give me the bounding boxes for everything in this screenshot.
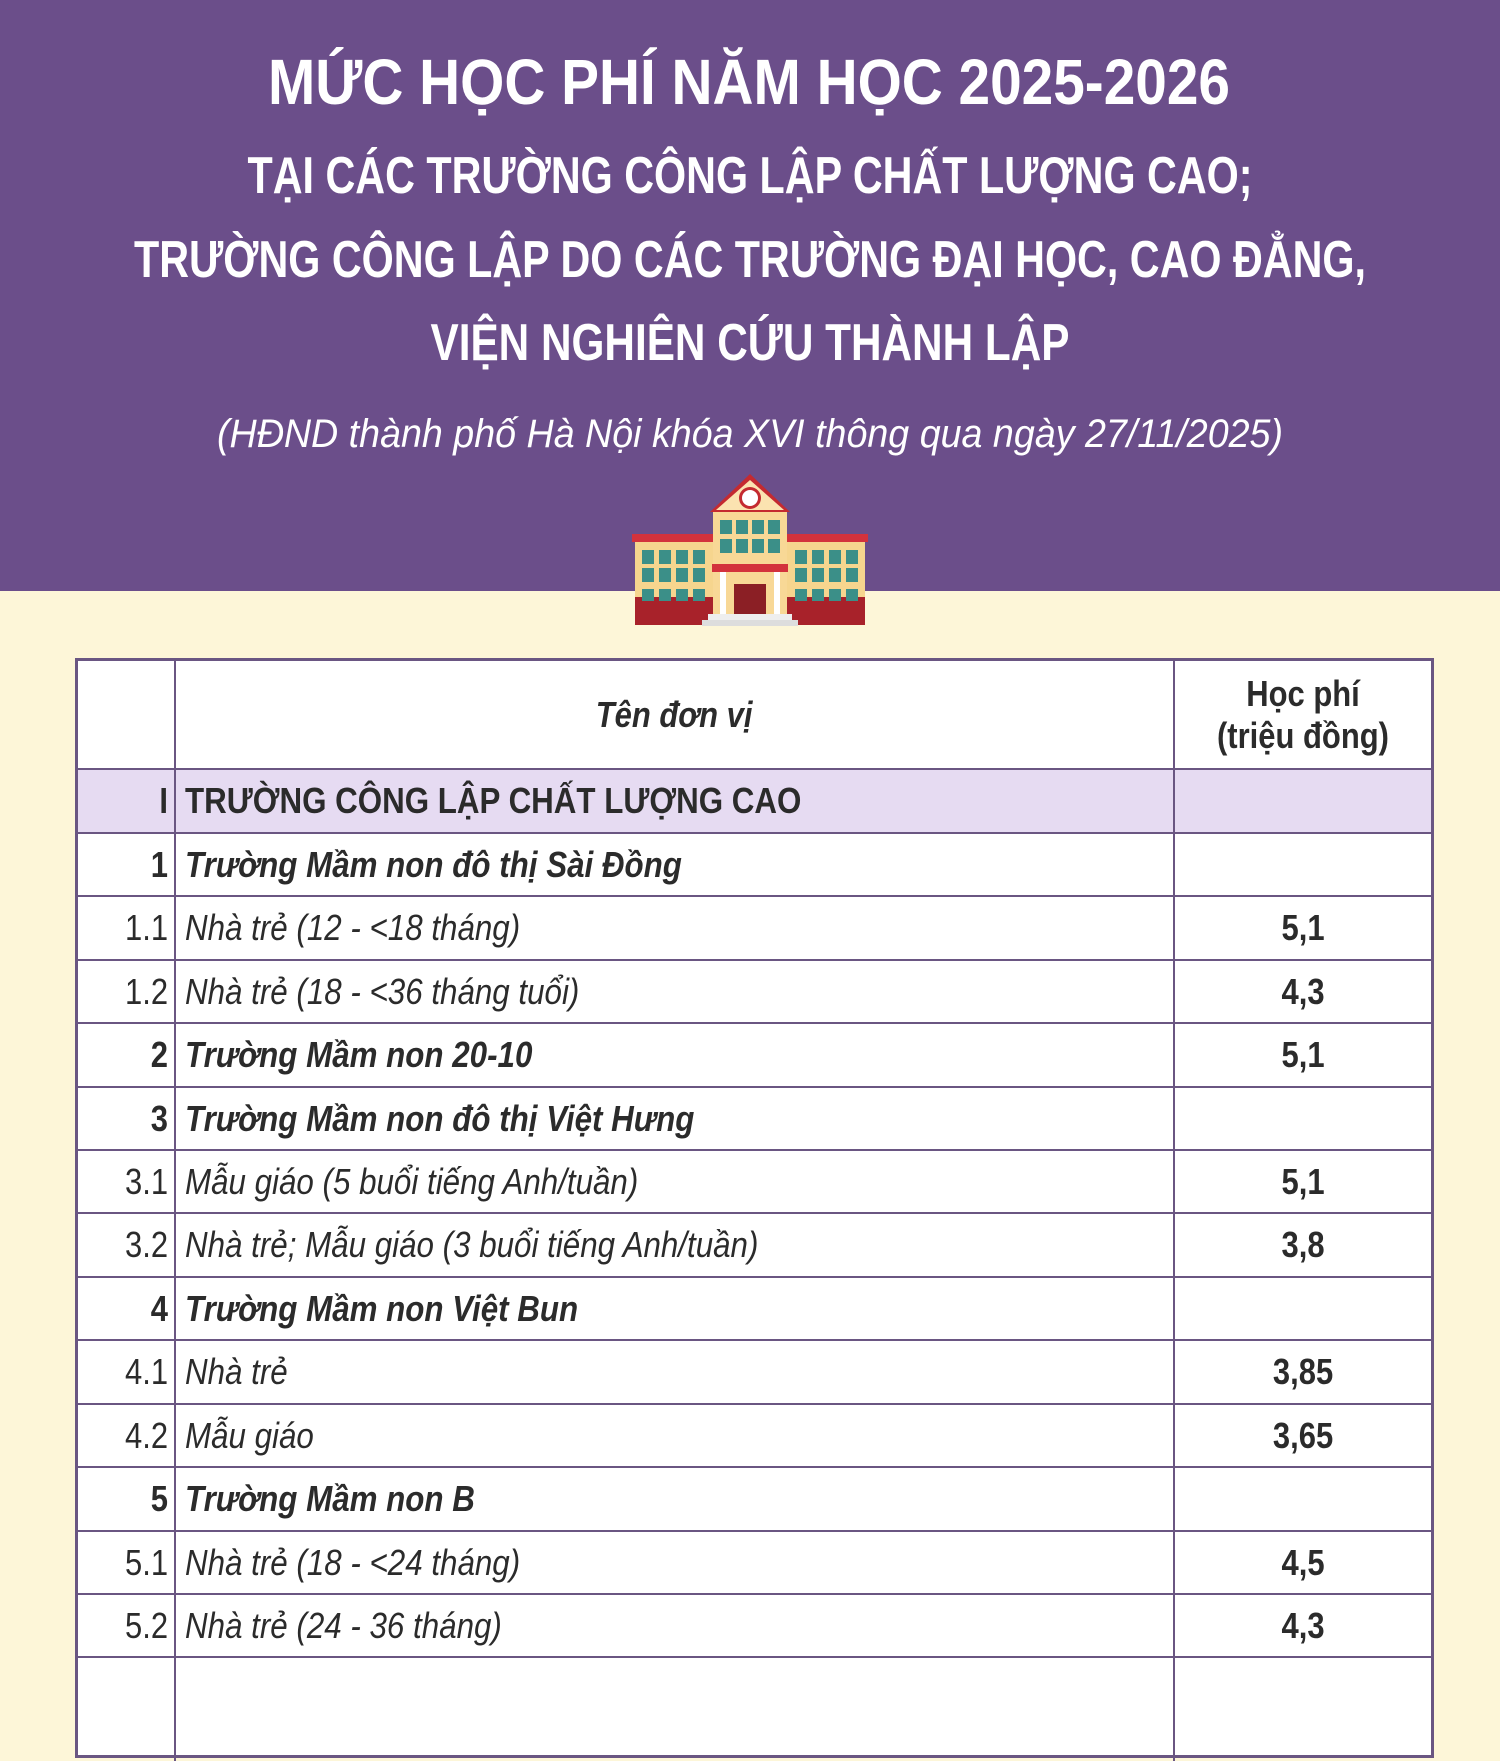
row 5.1: 5.1 <box>125 1542 168 1582</box>
row 1.2: 1.2 <box>125 970 168 1012</box>
row 4.1 <box>78 1339 1431 1403</box>
row 2: Trường Mầm non 20-10 <box>185 1034 532 1075</box>
row 1 <box>78 832 1431 895</box>
row 3.2: Nhà trẻ; Mẫu giáo (3 buổi tiếng Anh/tuần) <box>185 1224 758 1265</box>
row 5.1: 4,5 <box>1281 1542 1325 1582</box>
row 5.1 <box>78 1530 1431 1593</box>
table header row: (triệu đồng) <box>1217 714 1389 756</box>
row 3: Trường Mầm non đô thị Việt Hưng <box>185 1098 694 1138</box>
section I row: I <box>159 780 168 821</box>
title: VIỆN NGHIÊN CỨU THÀNH LẬP <box>430 313 1070 372</box>
row 1.1: 5,1 <box>1281 907 1325 948</box>
row 4.1: Nhà trẻ <box>185 1351 288 1392</box>
row 3.1: 5,1 <box>1281 1160 1325 1202</box>
row 3.2 <box>78 1212 1431 1276</box>
row 4.2: Mẫu giáo <box>185 1414 314 1456</box>
row 3.1: Mẫu giáo (5 buổi tiếng Anh/tuần) <box>185 1160 638 1202</box>
row 1.1: Nhà trẻ (12 - <18 tháng) <box>185 907 520 948</box>
row 4.2: 3,65 <box>1273 1414 1333 1456</box>
row 1.1: 1.1 <box>125 907 168 948</box>
next row (cut off) <box>78 1656 1431 1720</box>
table <box>75 658 1434 1758</box>
row 3.2: 3,8 <box>1281 1224 1325 1265</box>
row 5.2: 5.2 <box>125 1604 168 1646</box>
row 1.2: Nhà trẻ (18 - <36 tháng tuổi) <box>185 970 579 1012</box>
subtitle: (HĐND thành phố Hà Nội khóa XVI thông qua ngày 27/11/2025) <box>217 412 1283 456</box>
row 4.1: 4.1 <box>125 1351 168 1392</box>
row 1: Trường Mầm non đô thị Sài Đồng <box>185 844 682 884</box>
row 5.2: Nhà trẻ (24 - 36 tháng) <box>185 1604 502 1646</box>
section I row: TRƯỜNG CÔNG LẬP CHẤT LƯỢNG CAO <box>185 780 801 821</box>
header band <box>0 0 1500 591</box>
table header row: Học phí <box>1246 672 1360 714</box>
row 1.1 <box>78 895 1431 959</box>
row 2: 2 <box>151 1034 168 1075</box>
row 1: 1 <box>151 844 168 884</box>
row 2: 5,1 <box>1281 1034 1325 1075</box>
title: MỨC HỌC PHÍ NĂM HỌC 2025-2026 <box>268 46 1230 118</box>
row 4 <box>78 1276 1431 1339</box>
title <box>134 46 1366 372</box>
row 5: Trường Mầm non B <box>185 1478 475 1519</box>
table header row: Tên đơn vị <box>596 694 752 734</box>
row 5 <box>78 1466 1431 1530</box>
row 3: 3 <box>151 1098 168 1138</box>
row 1.2 <box>78 959 1431 1022</box>
section I row <box>78 768 1431 832</box>
row 3.1: 3.1 <box>125 1160 168 1202</box>
row 4: 4 <box>151 1288 168 1328</box>
table header row <box>596 672 1389 756</box>
row 4.1: 3,85 <box>1273 1351 1333 1392</box>
row 3.1 <box>78 1149 1431 1212</box>
row 5: 5 <box>151 1478 168 1519</box>
row 5.2: 4,3 <box>1281 1604 1325 1646</box>
row 4.2: 4.2 <box>125 1414 168 1456</box>
row 5.1: Nhà trẻ (18 - <24 tháng) <box>185 1542 520 1582</box>
title: TẠI CÁC TRƯỜNG CÔNG LẬP CHẤT LƯỢNG CAO; <box>248 146 1252 205</box>
row 2 <box>78 1022 1431 1086</box>
row 3.2: 3.2 <box>125 1224 168 1265</box>
icon: school building <box>632 474 868 626</box>
row 1.2: 4,3 <box>1281 970 1325 1012</box>
row 5.2 <box>78 1593 1431 1656</box>
row 4.2 <box>78 1403 1431 1466</box>
row 3 <box>78 1086 1431 1149</box>
row 4: Trường Mầm non Việt Bun <box>185 1288 578 1328</box>
